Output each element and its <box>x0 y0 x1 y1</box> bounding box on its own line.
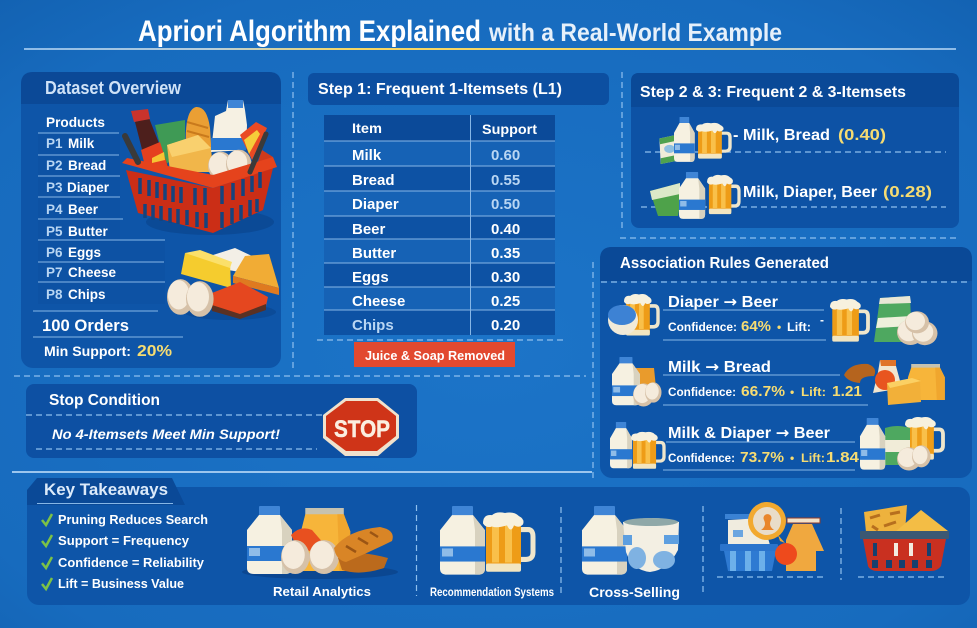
rule: milk to bread: 1.21 <box>832 384 862 400</box>
product list: P2 <box>46 158 63 173</box>
icon: shopping basket <box>122 100 277 235</box>
rule: milk to bread: 66.7% <box>741 384 785 400</box>
table: item support: Bread <box>352 172 395 189</box>
use case: recommendation systems <box>430 506 554 599</box>
heading: dataset overview: Dataset Overview <box>45 78 182 98</box>
icon: stop sign <box>323 398 399 456</box>
rule: diaper to beer: - <box>820 313 824 327</box>
heading: association rules: Association Rules Generated <box>620 255 829 272</box>
row: milk bread itemset: (0.40) <box>838 127 886 144</box>
rule: milk and diaper to beer: 73.7% <box>740 450 784 466</box>
table: item support: 0.30 <box>491 269 520 286</box>
rule: diaper to beer: Confidence: <box>668 320 737 334</box>
rule: milk and diaper to beer: 1.84 <box>826 450 859 466</box>
rule: milk to bread <box>612 357 945 406</box>
heading: key takeaways <box>27 478 185 505</box>
rule: diaper to beer: 64% <box>741 319 771 335</box>
table: item support <box>324 115 555 335</box>
title: with a Real-World Example <box>488 19 782 47</box>
product list: Products <box>46 114 105 130</box>
table: item support: 0.40 <box>491 221 520 238</box>
icon: butter eggs and cheese <box>167 248 279 320</box>
product list: Butter <box>68 224 108 239</box>
table: item support: Diaper <box>352 196 399 213</box>
panel: key takeaways <box>27 478 970 605</box>
panel: stop condition <box>26 384 417 458</box>
table: item support: Beer <box>352 221 386 238</box>
table: item support: Cheese <box>352 293 405 310</box>
row: milk bread itemset <box>659 117 886 164</box>
rule: milk and diaper to beer <box>610 417 943 470</box>
panel: dataset overview <box>21 72 281 368</box>
takeaway list: Confidence = Reliability <box>58 555 205 570</box>
panel: association rules <box>600 247 972 478</box>
takeaway list <box>42 512 208 591</box>
orders and min support: Min Support: <box>44 343 131 359</box>
product list: Chips <box>68 287 106 302</box>
panel: step 2 and 3 <box>631 73 959 228</box>
use case: recommendation systems: Recommendation Systems <box>430 587 554 599</box>
table: item support: 0.25 <box>491 293 520 310</box>
orders and min support <box>33 311 183 360</box>
callout: removed items: Juice & Soap Removed <box>365 348 505 363</box>
heading: step 1: Step 1: Frequent 1-Itemsets (L1) <box>318 81 562 98</box>
rule: milk to bread: Milk → Bread <box>668 358 771 376</box>
rule: milk and diaper to beer: Milk & Diaper → Beer <box>668 424 830 442</box>
title <box>138 15 782 48</box>
orders and min support: 20% <box>137 343 172 360</box>
rule: diaper to beer: • <box>777 320 781 334</box>
product list: Milk <box>68 136 95 151</box>
table: item support: Butter <box>352 245 396 262</box>
takeaway list: Lift = Business Value <box>58 576 184 591</box>
heading: key takeaways: Key Takeaways <box>44 480 168 499</box>
rule: diaper to beer: Lift: <box>787 320 811 334</box>
row: milk bread itemset: - Milk, Bread <box>733 127 830 144</box>
table: item support: 0.35 <box>491 245 520 262</box>
product list: P8 <box>46 287 63 302</box>
product list: Diaper <box>67 180 110 195</box>
use case: cross-selling: Cross-Selling <box>589 585 680 600</box>
table: item support: Eggs <box>352 269 389 286</box>
icon: stop sign: STOP <box>334 416 390 443</box>
heading: dataset overview <box>21 72 281 104</box>
table: item support: Chips <box>352 317 394 334</box>
row: milk diaper beer itemset: Milk, Diaper, Beer <box>743 184 877 201</box>
rule: milk to bread: Lift: <box>801 385 826 399</box>
table: item support: 0.20 <box>491 317 520 334</box>
heading: step 2 and 3: Step 2 & 3: Frequent 2 & 3-Itemsets <box>640 84 906 101</box>
product list: P6 <box>46 245 63 260</box>
product list: P1 <box>46 136 63 151</box>
product list: Bread <box>68 158 106 173</box>
icon: basket with cheese <box>860 505 949 571</box>
product list: Eggs <box>68 245 101 260</box>
table: item support: 0.55 <box>491 172 520 189</box>
table: item support: Support <box>482 121 537 137</box>
use case: retail analytics <box>242 506 398 599</box>
panel: stop condition: Stop Condition <box>49 392 160 409</box>
takeaway list: Pruning Reduces Search <box>58 512 208 527</box>
row: milk diaper beer itemset: (0.28) <box>883 184 932 201</box>
product list: Beer <box>68 202 99 217</box>
rule: diaper to beer <box>608 293 938 345</box>
rule: milk and diaper to beer: Lift: <box>801 451 825 465</box>
product list: P4 <box>46 202 63 217</box>
panel: stop condition: No 4-Itemsets Meet Min Support! <box>52 426 280 442</box>
rule: milk to bread: • <box>790 385 794 399</box>
panel: step 1 frequent itemsets <box>308 73 609 367</box>
product list: P3 <box>46 180 63 195</box>
rule: milk and diaper to beer: • <box>790 451 794 465</box>
product list: P7 <box>46 265 63 280</box>
callout: removed items <box>354 342 515 367</box>
table: item support: Milk <box>352 147 382 164</box>
rule: milk to bread: Confidence: <box>668 385 736 399</box>
product list: Cheese <box>68 265 117 280</box>
takeaway list: Support = Frequency <box>58 533 190 548</box>
table: item support: 0.60 <box>491 147 520 164</box>
use case: cross-selling <box>582 506 680 600</box>
heading: step 1 <box>308 73 609 105</box>
product list <box>38 114 165 304</box>
row: milk diaper beer itemset <box>650 172 932 219</box>
rule: milk and diaper to beer: Confidence: <box>668 451 735 465</box>
use case: retail analytics: Retail Analytics <box>273 584 371 599</box>
rule: diaper to beer: Diaper → Beer <box>668 293 778 311</box>
table: item support: 0.50 <box>491 196 520 213</box>
product list: P5 <box>46 224 63 239</box>
heading: association rules <box>600 247 972 281</box>
icon: personalized shopping <box>720 502 824 571</box>
orders and min support: 100 Orders <box>42 316 129 335</box>
title: Apriori Algorithm Explained <box>138 15 481 48</box>
table: item support: Item <box>352 120 382 136</box>
heading: step 2 and 3 <box>631 73 959 107</box>
